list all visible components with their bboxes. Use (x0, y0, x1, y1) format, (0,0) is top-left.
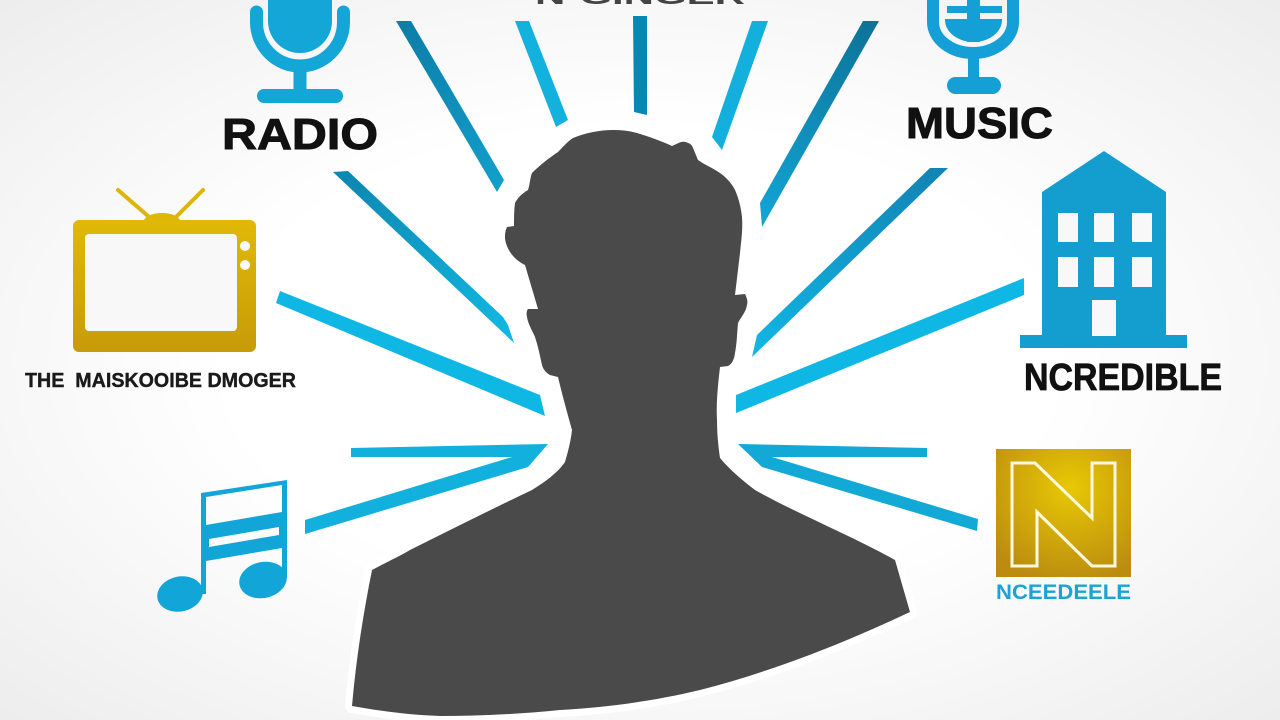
icon: music microphone (933, 0, 1013, 94)
icon: gold N badge (996, 449, 1131, 577)
icon: building (1020, 151, 1187, 348)
icon: television (73, 190, 256, 352)
label: MUSIC: MUSIC (906, 99, 1053, 148)
label: NCREDIBLE: NCREDIBLE (1024, 357, 1222, 399)
central silhouette of a person (352, 130, 910, 716)
rays: radiating lines (276, 16, 1024, 534)
label: RADIO: RADIO (222, 110, 378, 159)
label: NCEEDEELE: NCEEDEELE (996, 581, 1131, 604)
icon: music note (154, 480, 290, 616)
label: television caption: THE MAISKOOIBE DMOGER (25, 370, 297, 392)
icon: radio microphone (256, 0, 344, 103)
